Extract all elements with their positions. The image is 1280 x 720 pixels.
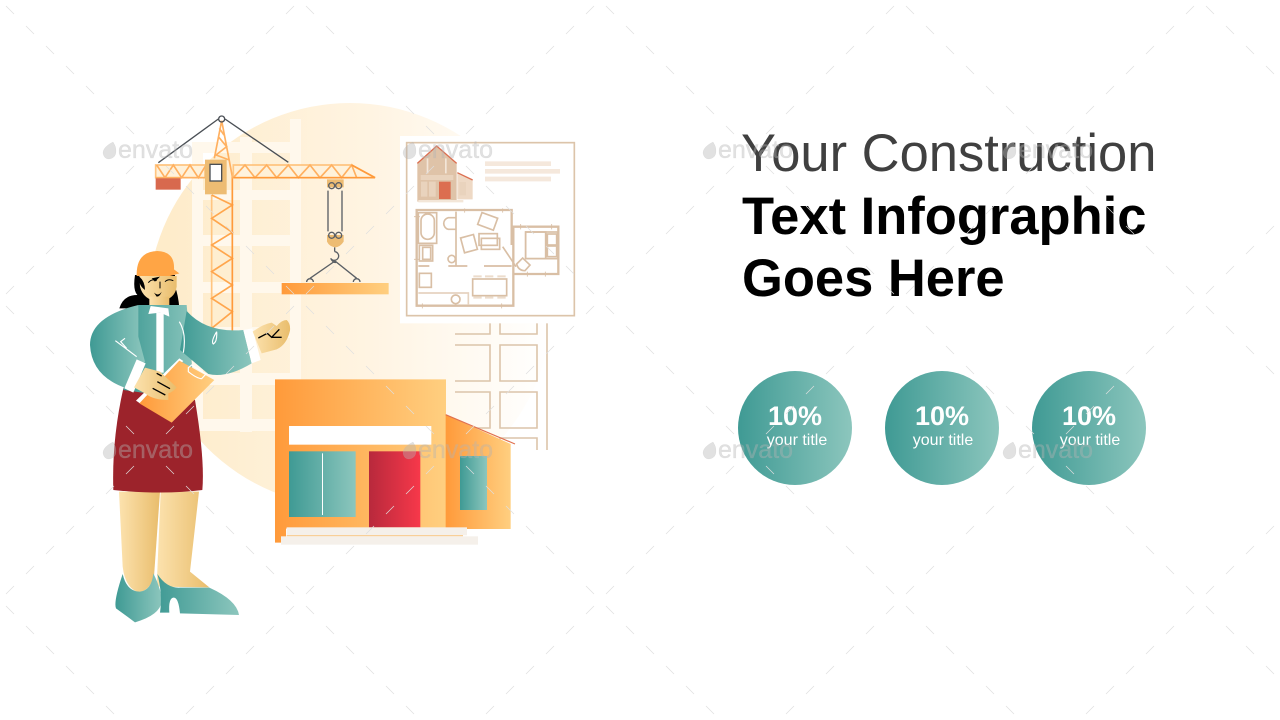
title	[741, 124, 1156, 308]
hand holding clipboard	[134, 368, 177, 400]
woman in hard hat	[90, 251, 290, 622]
stock watermarks: envato	[118, 436, 193, 464]
stat circle 1: your title	[767, 432, 827, 449]
skirt	[113, 388, 203, 492]
spec text lines	[485, 161, 560, 181]
small house drawing	[417, 146, 473, 202]
door	[369, 451, 420, 527]
crane	[156, 116, 389, 333]
stat circle 1	[738, 371, 852, 485]
steps	[281, 527, 478, 545]
stock watermarks: envato	[718, 136, 793, 164]
floor plan	[414, 208, 558, 308]
stock watermarks: envato	[1018, 436, 1093, 464]
shirt sleeves	[90, 305, 252, 388]
clipboard	[136, 358, 214, 423]
sleeve folds	[115, 322, 217, 357]
outlined building grid	[455, 323, 547, 450]
side annex	[446, 415, 515, 529]
crane jib	[156, 165, 375, 178]
stat circle 1: 10%	[768, 401, 822, 431]
blueprint sheet	[400, 136, 580, 323]
title: Your Construction	[741, 124, 1156, 183]
window	[289, 451, 356, 517]
shirt collar and placket	[124, 306, 261, 393]
title: Goes Here	[742, 249, 1005, 308]
stat circle 3: 10%	[1062, 401, 1116, 431]
hanging beam	[282, 283, 389, 294]
hook assembly	[307, 179, 360, 282]
raised hand	[253, 320, 290, 353]
main facade	[275, 379, 446, 543]
stat circle 2: 10%	[915, 401, 969, 431]
stat circle 2	[885, 371, 999, 485]
stock watermarks: envato	[418, 136, 493, 164]
stat circle 3: your title	[1060, 432, 1120, 449]
crane cables	[158, 116, 288, 163]
crane tower	[212, 121, 232, 333]
shoes	[115, 573, 239, 622]
stock watermarks	[103, 136, 1093, 464]
stock watermarks: envato	[1018, 136, 1093, 164]
head and hair	[119, 251, 179, 317]
crane cab	[205, 160, 227, 194]
legs	[119, 492, 209, 592]
stock watermarks: envato	[118, 136, 193, 164]
stat circle 2: your title	[913, 432, 973, 449]
shirt torso	[123, 305, 195, 400]
shop sign band	[289, 426, 431, 445]
counterweight	[156, 178, 181, 190]
title: Text Infographic	[742, 187, 1146, 246]
stat circle 3	[1032, 371, 1146, 485]
building	[275, 379, 515, 545]
background circle with building silhouette	[148, 103, 552, 507]
stock watermarks: envato	[418, 436, 493, 464]
stock watermarks: envato	[718, 436, 793, 464]
